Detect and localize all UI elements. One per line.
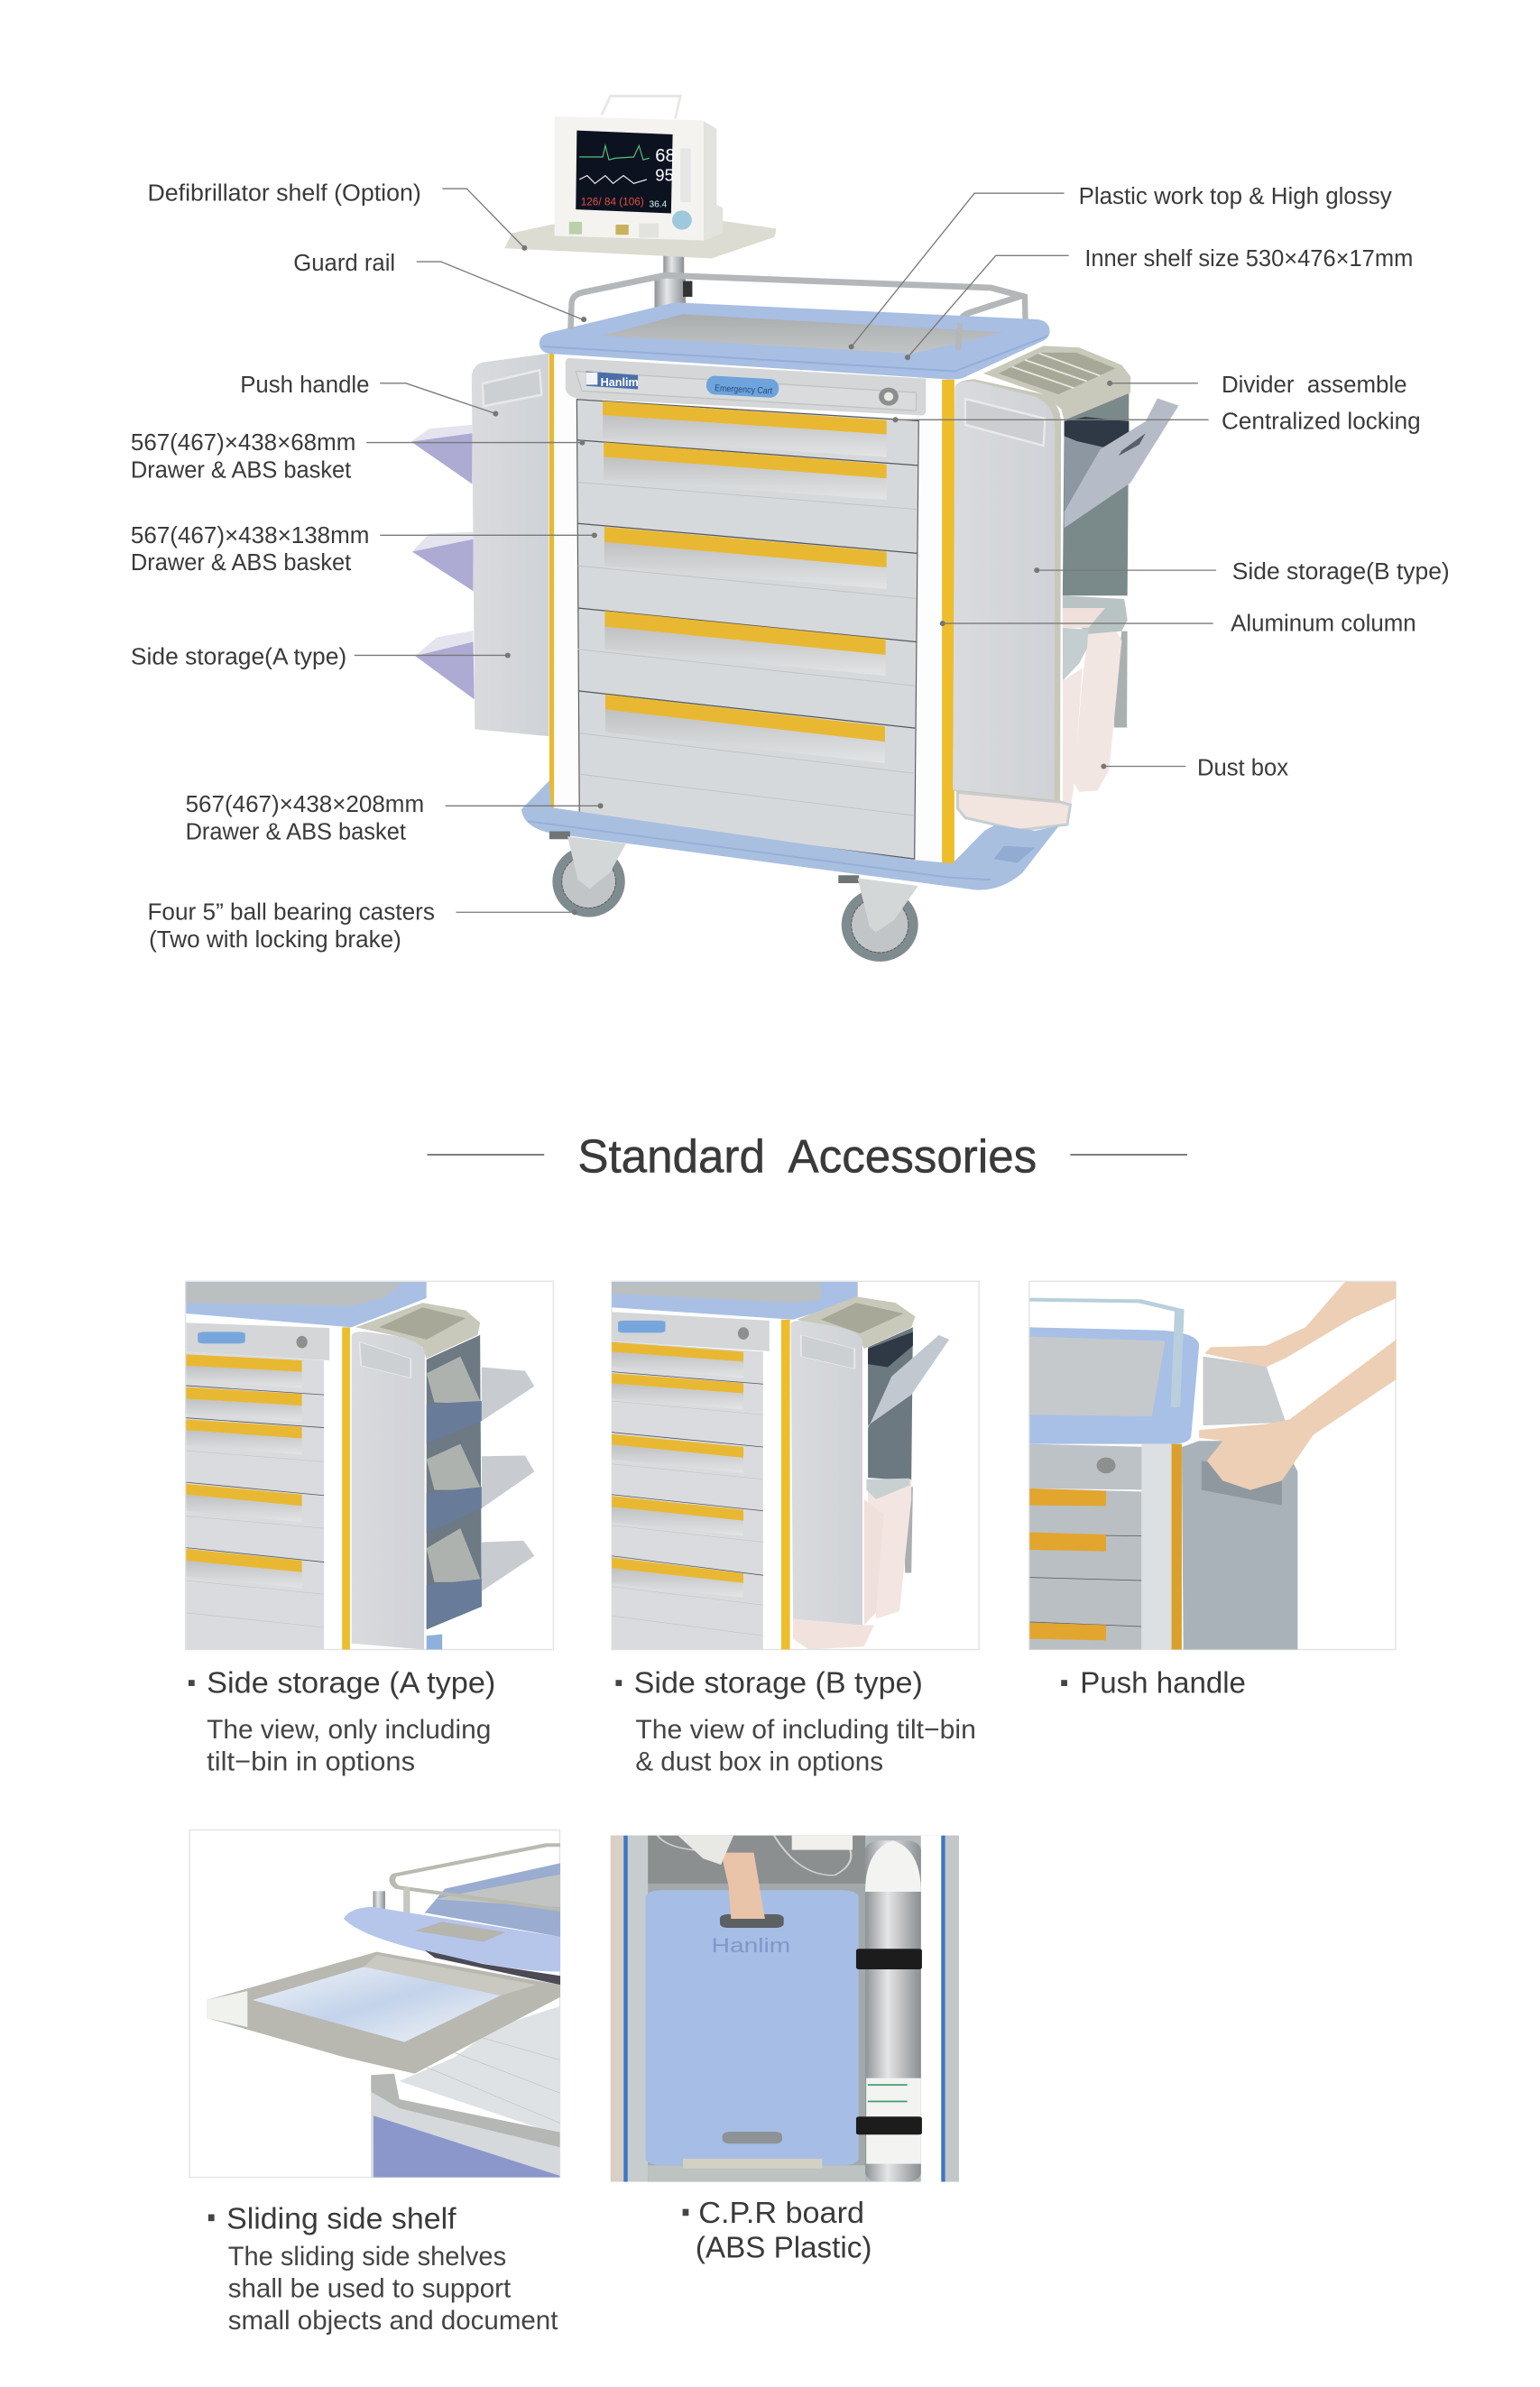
label: 68mm drawer: Drawer & ABS basket (131, 456, 352, 483)
label: casters: Four 5” ball bearing casters (147, 899, 435, 926)
tilt bin right (1065, 398, 1178, 528)
patient monitor (555, 96, 723, 242)
logo text: Hanlim (601, 376, 639, 389)
label: 208mm drawer (186, 790, 604, 844)
board logo text: Hanlim (712, 1934, 790, 1957)
callouts: left column (131, 180, 604, 953)
caption: side storage B type (615, 1666, 976, 1776)
label: divider (1107, 371, 1407, 398)
photo: C.P.R board (611, 1836, 959, 2182)
caption: side storage B type: The view of including tilt−bin (635, 1715, 976, 1745)
monitor readouts: 68 (655, 146, 676, 166)
label: inner shelf: Inner shelf size 530×476×17mm (1084, 244, 1413, 272)
label: guard rail (293, 249, 586, 322)
caption: sliding side shelf: small objects and document (228, 2306, 558, 2336)
label: dust box (1101, 754, 1288, 781)
left tilt bins (411, 425, 475, 699)
caption: C.P.R board: (ABS Plastic) (696, 2231, 871, 2265)
base frame (521, 780, 1059, 890)
caption: C.P.R board: C.P.R board (698, 2196, 864, 2230)
label: 68mm drawer: 567(467)×438×68mm (131, 429, 355, 456)
label: centralized locking: Centralized locking (1222, 407, 1421, 434)
label: aluminum column (940, 610, 1416, 637)
label: side storage A: Side storage(A type) (131, 643, 346, 670)
photo: push handle (1029, 1281, 1397, 1650)
right side storage panel (953, 346, 1130, 802)
monitor pole (654, 255, 692, 309)
monitor readouts: 95 (655, 166, 674, 185)
label: 138mm drawer: 567(467)×438×138mm (131, 521, 369, 548)
label: divider: Divider assemble (1222, 371, 1407, 398)
caption: side storage A type: Side storage (A type) (207, 1666, 495, 1700)
label: push handle: Push handle (240, 371, 369, 398)
dust boxes (957, 595, 1128, 830)
photo: side storage B type (612, 1281, 979, 1650)
label: 68mm drawer (131, 429, 585, 483)
section heading: Standard Accessories: Standard Accessories (577, 1130, 1037, 1183)
label: 138mm drawer (131, 521, 597, 576)
caption: C.P.R board (683, 2196, 871, 2265)
photo: sliding side shelf (189, 1830, 560, 2178)
label: side storage A (131, 643, 511, 670)
left side storage panel (472, 353, 552, 736)
label: 208mm drawer: Drawer & ABS basket (186, 817, 407, 844)
casters (549, 831, 918, 962)
photo: side storage A type (186, 1281, 553, 1650)
caption: side storage B type: Side storage (B type) (634, 1666, 923, 1700)
label: dust box: Dust box (1197, 754, 1288, 781)
header panel (566, 358, 926, 415)
caption: push handle: Push handle (1080, 1666, 1246, 1700)
label: side storage B (1034, 558, 1450, 585)
caption: side storage A type: tilt−bin in options (207, 1746, 415, 1776)
defibrillator shelf (504, 220, 776, 258)
cart label text: Emergency Cart (715, 383, 773, 397)
illustration: emergency cart (411, 96, 1178, 962)
label: guard rail: Guard rail (293, 249, 395, 276)
label: work top (849, 182, 1392, 349)
label: push handle (240, 371, 498, 417)
drawers (576, 400, 918, 859)
label: work top: Plastic work top & High glossy (1079, 182, 1392, 209)
caption: sliding side shelf: shall be used to support (228, 2273, 511, 2303)
caption: side storage A type: The view, only including (207, 1715, 491, 1745)
label: inner shelf (905, 244, 1413, 360)
caption: sliding side shelf (208, 2202, 558, 2336)
label: casters: (Two with locking brake) (149, 926, 401, 953)
label: side storage B: Side storage(B type) (1232, 558, 1450, 585)
dark back of right storage (1063, 391, 1129, 727)
monitor readouts: 36.4 (650, 199, 668, 209)
label: 208mm drawer: 567(467)×438×208mm (186, 790, 424, 817)
callouts: right column (849, 182, 1450, 781)
label: centralized locking (892, 407, 1421, 434)
caption: side storage A type (189, 1666, 495, 1776)
caption: sliding side shelf: The sliding side shelves (228, 2242, 506, 2272)
monitor readouts: 126/ 84 (106) (581, 197, 644, 208)
label: defibrillator shelf (147, 180, 527, 251)
label: 138mm drawer: Drawer & ABS basket (131, 548, 352, 576)
label: defibrillator shelf: Defibrillator shelf (Option) (147, 180, 421, 207)
caption: sliding side shelf: Sliding side shelf (226, 2202, 456, 2236)
aluminum columns (549, 353, 954, 864)
plastic work top (539, 302, 1050, 380)
guard rail (570, 275, 1026, 350)
monitor readouts (581, 146, 676, 209)
label: casters (147, 899, 577, 953)
label: aluminum column: Aluminum column (1231, 610, 1416, 637)
caption: side storage B type: & dust box in options (635, 1746, 883, 1776)
